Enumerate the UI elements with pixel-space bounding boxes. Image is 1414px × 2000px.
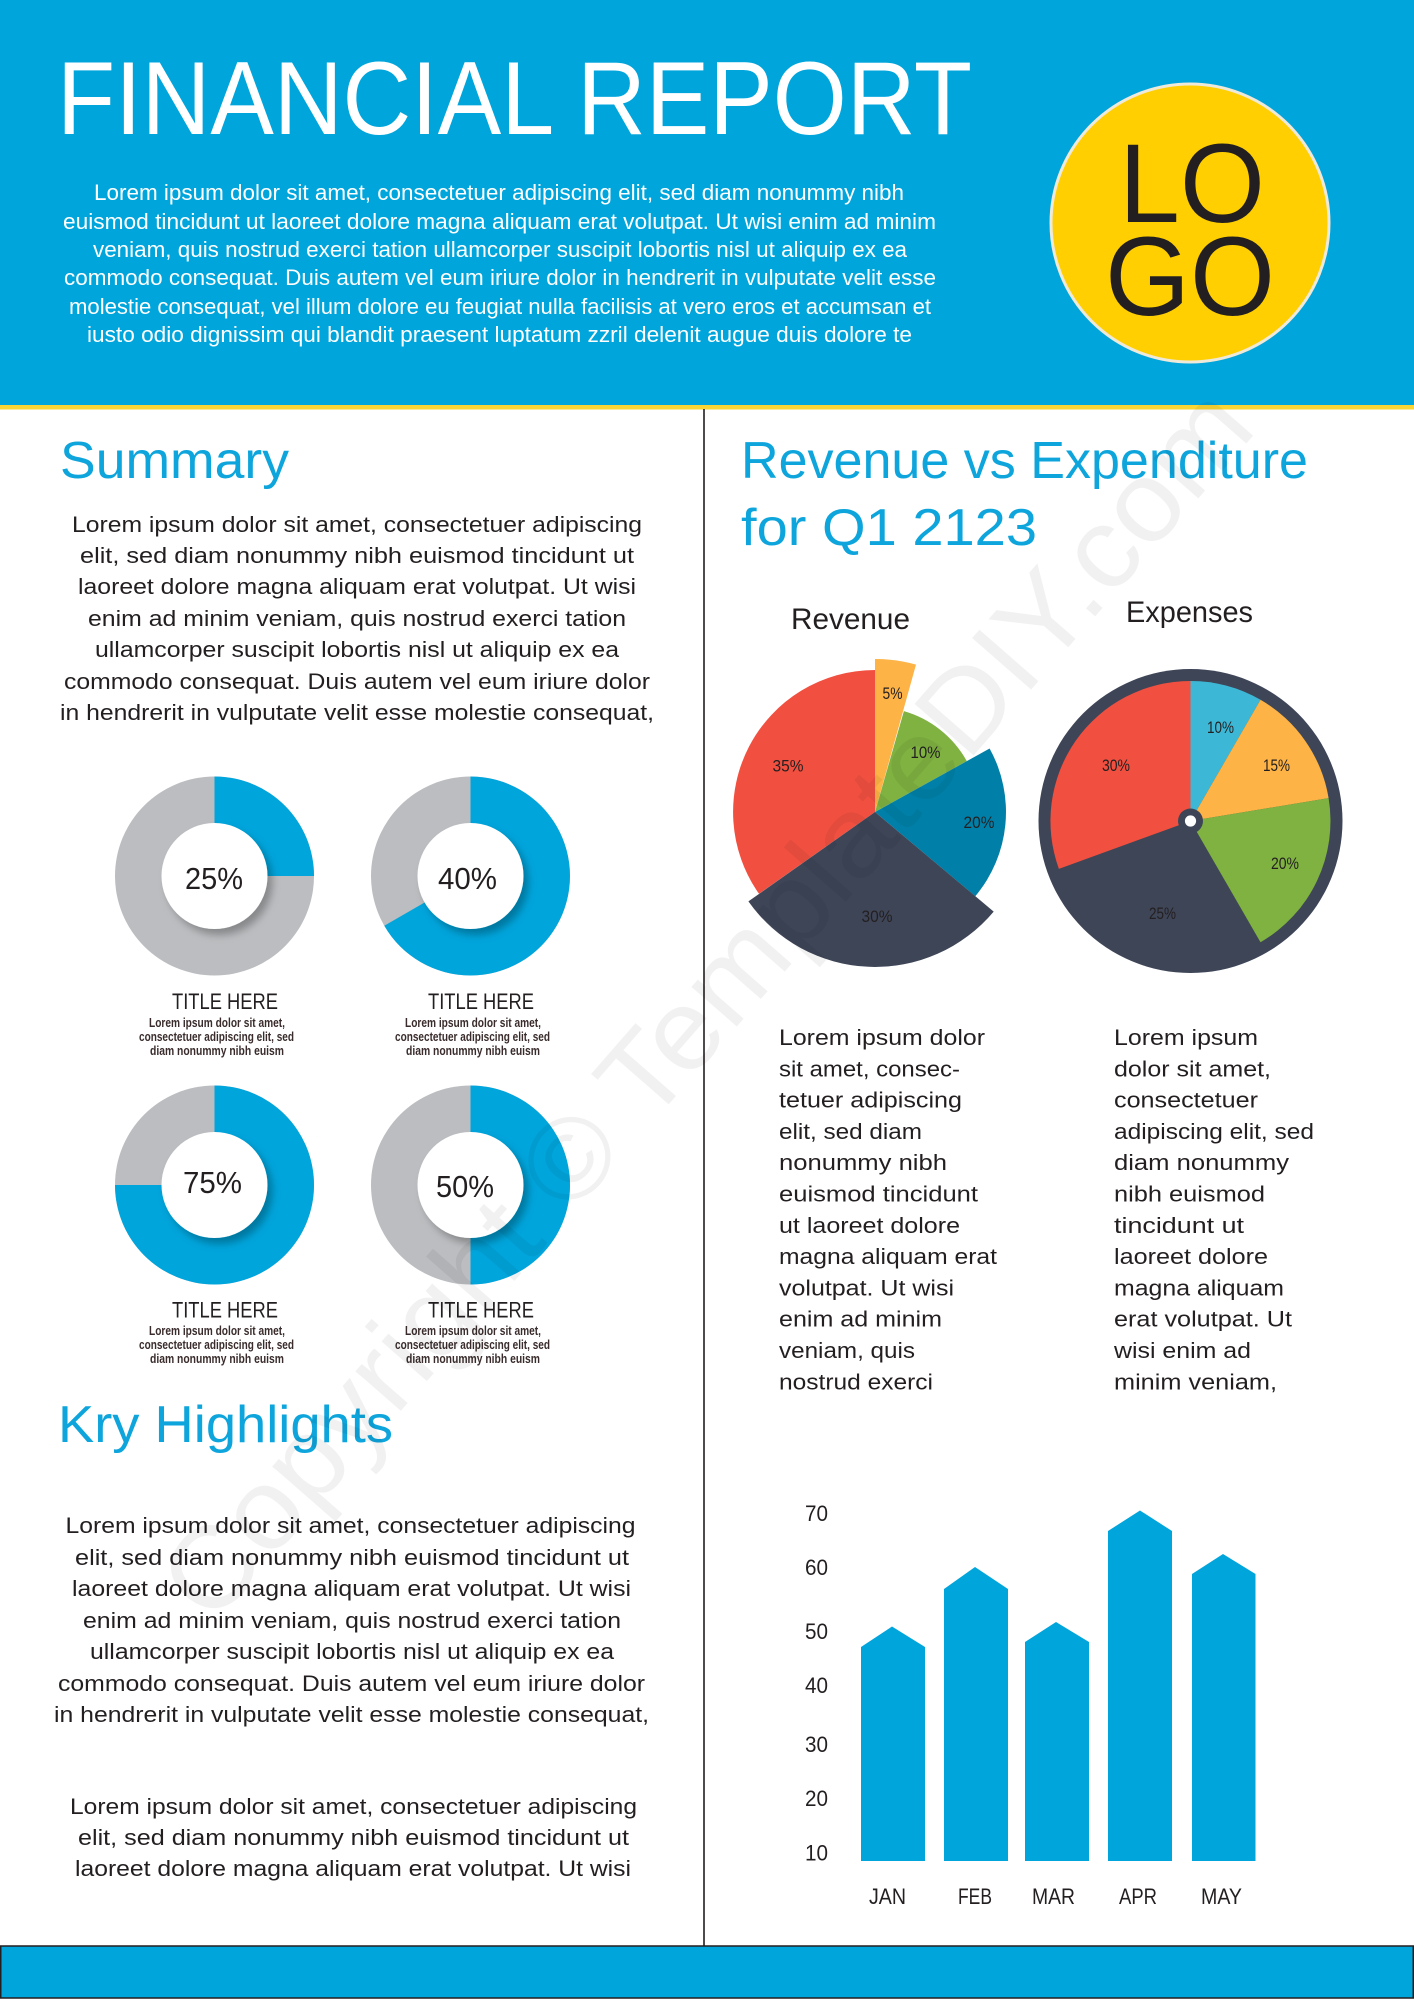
y axis labels: 60 (805, 1555, 828, 1580)
y axis labels: 50 (805, 1619, 828, 1644)
expenses pie chart (1038, 669, 1342, 973)
revenue column text: volutpat. Ut wisi (779, 1275, 954, 1300)
highlights text 1: enim ad minim veniam, quis nostrud exerci tation (83, 1608, 621, 1633)
title: FINANCIAL REPORT (57, 41, 972, 157)
header intro text: iusto odio dignissim qui blandit praesent luptatum zzril delenit augue duis dolore te (87, 322, 912, 347)
revenue column text: magna aliquam erat (779, 1244, 998, 1269)
bar chart (805, 1501, 1256, 1909)
revenue column text: Lorem ipsum dolor (779, 1025, 986, 1050)
donut 25% (115, 776, 314, 976)
highlights text 2: Lorem ipsum dolor sit amet, consectetuer adipiscing (70, 1794, 637, 1819)
donut caption 4: consectetuer adipiscing elit, sed (395, 1338, 550, 1352)
revenue column text: enim ad minim (779, 1307, 942, 1332)
donut caption 2: consectetuer adipiscing elit, sed (395, 1030, 550, 1044)
x axis labels: FEB (958, 1884, 992, 1909)
donut caption 2: diam nonummy nibh euism (406, 1044, 540, 1058)
revenue column text: elit, sed diam (779, 1119, 922, 1144)
summary text: commodo consequat. Duis autem vel eum iriure dolor (64, 669, 651, 694)
expenses column text: laoreet dolore (1114, 1244, 1268, 1269)
revenue column text: nonummy nibh (779, 1150, 947, 1175)
header intro text (63, 180, 936, 347)
donut 40% (371, 776, 570, 976)
donut 40%: 40% (438, 861, 497, 896)
x axis labels: MAR (1032, 1884, 1075, 1909)
logo badge: LO (1119, 121, 1265, 246)
revenue column text: veniam, quis (779, 1338, 915, 1363)
header intro text: commodo consequat. Duis autem vel eum iriure dolor in hendrerit in vulputate velit esse (64, 265, 936, 290)
revenue pie chart: 35% (772, 756, 804, 776)
watermark: Copyright © TemplateDIY.com (135, 363, 1277, 1643)
expenses column text: wisi enim ad (1113, 1338, 1251, 1363)
revenue column text: tetuer adipiscing (779, 1088, 962, 1113)
expenses column text: adipiscing elit, sed (1114, 1119, 1314, 1144)
x axis labels (869, 1884, 1242, 1909)
header band (0, 0, 1414, 410)
donut caption 3: Lorem ipsum dolor sit amet, (149, 1324, 285, 1338)
highlights text 2: laoreet dolore magna aliquam erat volutpat. Ut wisi (75, 1856, 631, 1881)
expenses column text (1113, 1025, 1314, 1394)
header intro text: veniam, quis nostrud exerci tation ullamcorper suscipit lobortis nisl ut aliquip ex ea (93, 237, 908, 262)
expenses pie chart: 25% (1149, 904, 1176, 923)
summary text: ullamcorper suscipit lobortis nisl ut aliquip ex ea (95, 637, 620, 662)
expenses column text: erat volutpat. Ut (1114, 1307, 1293, 1332)
y axis labels: 40 (805, 1673, 828, 1698)
summary text: enim ad minim veniam, quis nostrud exerci tation (88, 606, 626, 631)
donut caption 4: diam nonummy nibh euism (406, 1352, 540, 1366)
donut caption 3 (139, 1298, 294, 1366)
donut caption 4: Lorem ipsum dolor sit amet, (405, 1324, 541, 1338)
revenue pie title: Revenue (791, 603, 910, 636)
revenue pie chart: 10% (910, 743, 940, 762)
revenue pie chart: 20% (964, 813, 994, 832)
donut caption 1: diam nonummy nibh euism (150, 1044, 284, 1058)
x axis labels: APR (1119, 1884, 1157, 1909)
highlights text 1: in hendrerit in vulputate velit esse molestie consequat, (54, 1702, 649, 1727)
donut 50% (371, 1086, 570, 1284)
summary text: Lorem ipsum dolor sit amet, consectetuer adipiscing (72, 512, 642, 537)
expenses column text: diam nonummy (1114, 1150, 1290, 1175)
heading: revenue vs expenditure (741, 432, 1308, 557)
expenses column text: Lorem ipsum (1114, 1025, 1258, 1050)
summary text: elit, sed diam nonummy nibh euismod tincidunt ut (80, 543, 635, 568)
highlights text 1: commodo consequat. Duis autem vel eum iriure dolor (58, 1671, 646, 1696)
heading: revenue vs expenditure: for Q1 2123 (741, 499, 1037, 557)
donut caption 3: diam nonummy nibh euism (150, 1352, 284, 1366)
donut caption 2: TITLE HERE (428, 989, 534, 1014)
expenses pie title: Expenses (1126, 596, 1253, 629)
heading: revenue vs expenditure: Revenue vs Expenditure (741, 432, 1308, 490)
highlights text 1: Lorem ipsum dolor sit amet, consectetuer adipiscing (66, 1513, 636, 1538)
x axis labels: JAN (869, 1884, 906, 1909)
logo badge (1051, 84, 1329, 362)
donut caption 3: TITLE HERE (172, 1298, 278, 1322)
expenses pie chart: 20% (1271, 854, 1299, 873)
donut 25%: 25% (185, 861, 243, 896)
logo badge: GO (1105, 214, 1275, 339)
expenses column text: nibh euismod (1114, 1182, 1265, 1206)
revenue pie chart: 30% (862, 907, 892, 926)
donut caption 4 (395, 1298, 550, 1366)
donut 75%: 75% (183, 1165, 242, 1200)
revenue column text: sit amet, consec- (779, 1056, 960, 1081)
highlights text 2: elit, sed diam nonummy nibh euismod tincidunt ut (78, 1825, 630, 1850)
donut caption 1 (139, 989, 294, 1058)
column divider (703, 409, 705, 1946)
expenses pie chart: 10% (1207, 718, 1234, 737)
donut caption 4: TITLE HERE (428, 1298, 534, 1322)
highlights text 1 (54, 1513, 649, 1727)
expenses column text: dolor sit amet, (1114, 1056, 1271, 1081)
donut caption 1: Lorem ipsum dolor sit amet, (149, 1016, 285, 1030)
header intro text: Lorem ipsum dolor sit amet, consectetuer adipiscing elit, sed diam nonummy nibh (94, 180, 904, 205)
heading: summary: Summary (60, 432, 289, 490)
y axis labels: 30 (805, 1732, 828, 1757)
expenses column text: magna aliquam (1114, 1275, 1284, 1300)
expenses column text: tincidunt ut (1114, 1213, 1245, 1238)
summary text: in hendrerit in vulputate velit esse molestie consequat, (60, 700, 654, 725)
expenses column text: minim veniam, (1114, 1369, 1277, 1394)
y axis labels: 10 (805, 1840, 828, 1866)
y axis labels: 20 (805, 1786, 828, 1811)
expenses pie chart: 15% (1263, 756, 1290, 775)
highlights text 1: elit, sed diam nonummy nibh euismod tincidunt ut (75, 1545, 630, 1570)
revenue column text: ut laoreet dolore (779, 1213, 960, 1238)
donut caption 2 (395, 989, 550, 1058)
revenue column text (779, 1025, 998, 1394)
donut 50%: 50% (436, 1169, 494, 1204)
expenses column text: consectetuer (1114, 1088, 1259, 1113)
heading: key highlights: Kry Highlights (58, 1396, 393, 1454)
highlights text 1: laoreet dolore magna aliquam erat volutpat. Ut wisi (72, 1576, 631, 1601)
donut caption 1: TITLE HERE (172, 989, 278, 1014)
expenses pie chart: 30% (1102, 756, 1130, 775)
donut caption 2: Lorem ipsum dolor sit amet, (405, 1016, 541, 1030)
y axis labels (805, 1501, 828, 1866)
highlights text 2 (70, 1794, 637, 1881)
header intro text: molestie consequat, vel illum dolore eu feugiat nulla facilisis at vero eros et accumsan et (69, 294, 931, 319)
header intro text: euismod tincidunt ut laoreet dolore magna aliquam erat volutpat. Ut wisi enim ad minim (63, 209, 936, 234)
revenue pie chart: 5% (882, 684, 902, 703)
donut 75% (115, 1086, 314, 1284)
footer band (1, 1946, 1413, 1998)
revenue column text: euismod tincidunt (779, 1182, 979, 1206)
donut caption 1: consectetuer adipiscing elit, sed (139, 1030, 294, 1044)
y axis labels: 70 (805, 1501, 828, 1526)
summary text: laoreet dolore magna aliquam erat volutpat. Ut wisi (78, 574, 636, 599)
highlights text 1: ullamcorper suscipit lobortis nisl ut aliquip ex ea (90, 1639, 615, 1664)
donut caption 3: consectetuer adipiscing elit, sed (139, 1338, 294, 1352)
bars (861, 1510, 1256, 1861)
summary text (60, 512, 654, 725)
revenue pie chart (733, 659, 1006, 967)
revenue column text: nostrud exerci (779, 1369, 933, 1394)
x axis labels: MAY (1201, 1884, 1242, 1909)
